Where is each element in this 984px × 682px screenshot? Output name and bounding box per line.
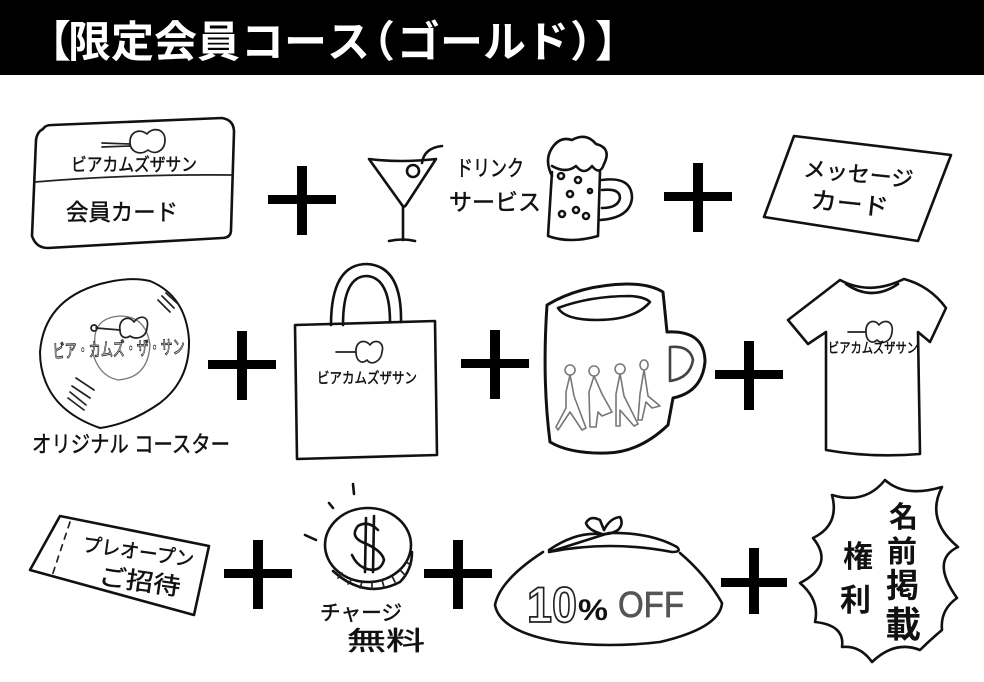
- coin purse: %: [578, 594, 608, 627]
- charge free label: チャージ: [320, 602, 402, 625]
- message card: [764, 136, 951, 241]
- plus 6: [224, 540, 292, 609]
- burst badge: 前: [887, 536, 917, 569]
- plus 2: [664, 163, 732, 232]
- coaster: オリジナル コースター: [32, 431, 230, 457]
- message card: メッセージ: [802, 156, 914, 192]
- charge free label: [320, 602, 425, 656]
- tote bag: [295, 264, 437, 459]
- cocktail: [369, 146, 442, 241]
- burst badge: 権: [843, 541, 873, 574]
- burst badge: 掲: [886, 567, 919, 604]
- member card: [32, 118, 234, 248]
- coaster: [32, 279, 230, 457]
- charge free label: 無料: [347, 626, 425, 656]
- coin purse: OFF: [618, 584, 684, 625]
- member card: 会員カード: [66, 199, 178, 225]
- coin purse: 10: [527, 577, 577, 633]
- drink service label: [449, 156, 541, 215]
- ticket: ご招待: [97, 563, 182, 601]
- plus 1: [268, 166, 336, 235]
- member card: ビアカムズザサン: [71, 155, 197, 175]
- coin purse: [495, 517, 722, 645]
- burst badge: 載: [885, 604, 921, 645]
- plus 3: [208, 331, 276, 400]
- drink service label: サービス: [449, 189, 541, 215]
- coffee mug: [545, 284, 705, 453]
- title banner: 【限定会員コース（ゴールド）】: [28, 8, 638, 70]
- tote bag: ビアカムズザサン: [317, 370, 417, 387]
- coin: [305, 484, 412, 589]
- t-shirt: [788, 279, 946, 455]
- plus 7: [424, 540, 492, 609]
- ticket: [30, 516, 209, 615]
- drink service label: ドリンク: [456, 156, 524, 181]
- ticket: プレオープン: [81, 534, 195, 572]
- message card: カード: [809, 187, 890, 222]
- title banner: [0, 0, 984, 75]
- walking figures: [556, 360, 660, 430]
- burst badge: 名: [889, 501, 918, 534]
- plus 5: [715, 341, 783, 410]
- burst badge: [800, 480, 958, 662]
- t-shirt: ビアカムズザサン: [828, 340, 918, 356]
- plus 4: [461, 330, 529, 399]
- plus 8: [721, 548, 787, 614]
- beer mug: [548, 137, 632, 240]
- coaster: ビア・カムズ・ザ・サン: [52, 336, 185, 363]
- burst badge: 利: [840, 583, 871, 618]
